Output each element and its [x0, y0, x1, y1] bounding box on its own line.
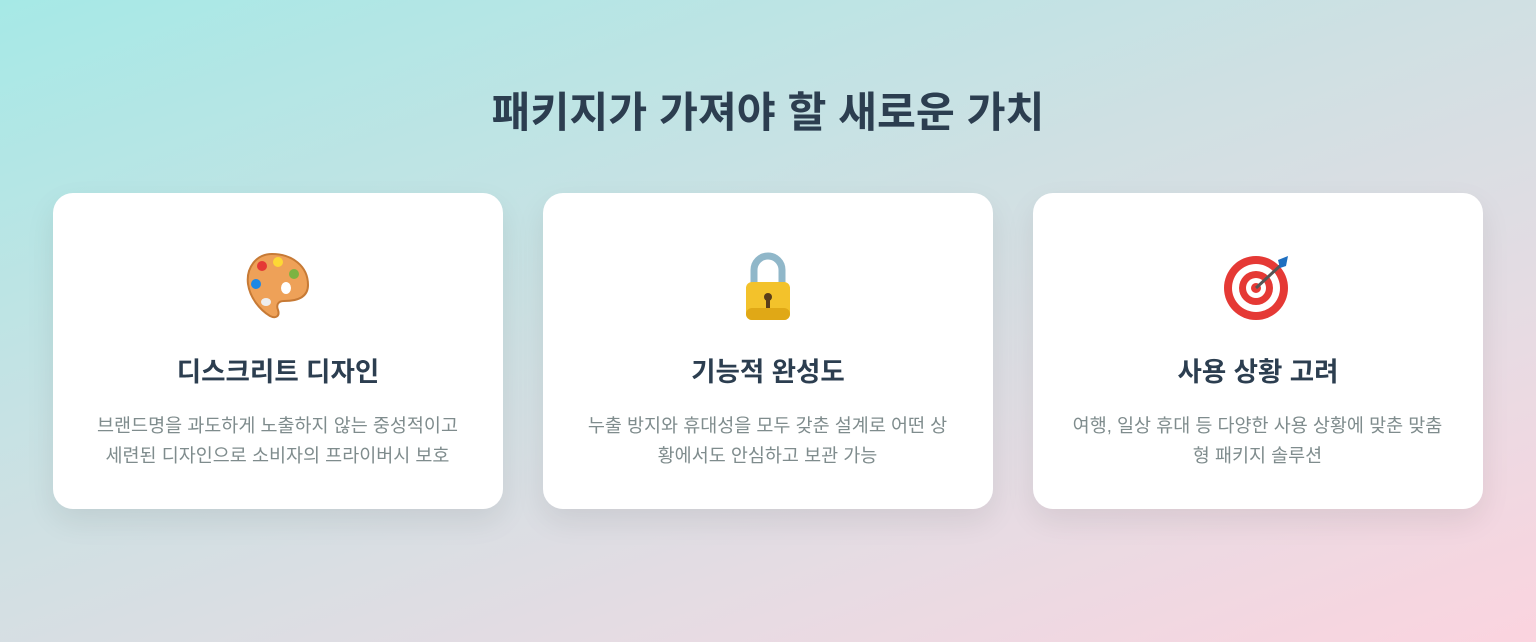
icon: palette — [246, 253, 309, 318]
title: 패키지가 가져야 할 새로운 가치 — [492, 89, 1044, 136]
heading: 디스크리트 디자인 — [177, 357, 379, 387]
panel: usage context — [1033, 193, 1483, 509]
text: 누출 방지와 휴대성을 모두 갖춘 설계로 어떤 상황에서도 안심하고 보관 가능 — [588, 415, 947, 466]
heading: 기능적 완성도 — [691, 357, 845, 387]
heading: 사용 상황 고려 — [1177, 357, 1338, 387]
text: 브랜드명을 과도하게 노출하지 않는 중성적이고 세련된 디자인으로 소비자의 프라이버시 보호 — [97, 415, 458, 466]
panel: discreet design — [53, 193, 503, 509]
icon: lock — [746, 252, 790, 320]
panel: functional completeness — [543, 193, 993, 509]
text: 여행, 일상 휴대 등 다양한 사용 상황에 맞춘 맞춤형 패키지 솔루션 — [1073, 415, 1442, 466]
icon: target — [1224, 256, 1288, 320]
